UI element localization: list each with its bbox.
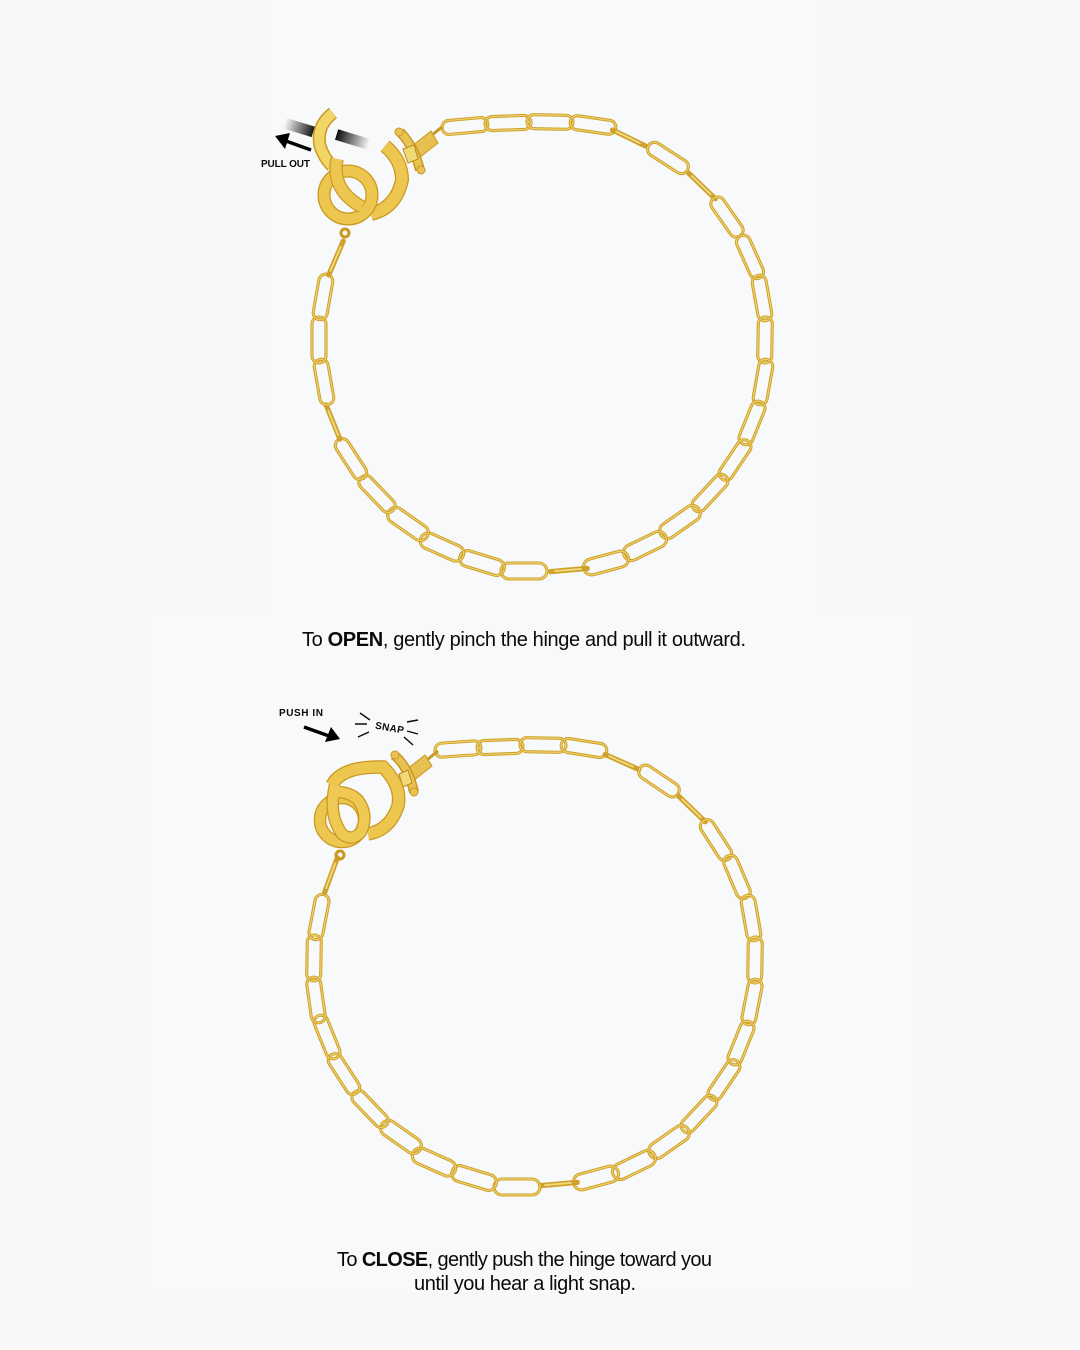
arrow: pull out — [275, 133, 311, 150]
caption: close: To CLOSE, gently push the hinge toward you — [337, 1249, 712, 1271]
caption: close: until you hear a light snap. — [414, 1273, 636, 1295]
bracelet: closed state — [279, 708, 763, 1195]
label: pull out: PULL OUT — [261, 159, 310, 170]
motion marks — [283, 118, 371, 150]
caption: open: To OPEN, gently pinch the hinge and pull it outward. — [302, 629, 746, 651]
snap burst lines — [355, 713, 418, 745]
label: push in: PUSH IN — [279, 708, 323, 719]
caption: close — [337, 1249, 712, 1295]
arrow: push in — [304, 727, 340, 742]
clasp: closed hinge — [320, 751, 438, 859]
chain links — [312, 115, 774, 579]
label: snap: SNAP — [374, 721, 405, 737]
bracelet: open state — [261, 113, 774, 579]
chain links — [306, 737, 763, 1195]
clasp: open hinge — [319, 113, 442, 237]
